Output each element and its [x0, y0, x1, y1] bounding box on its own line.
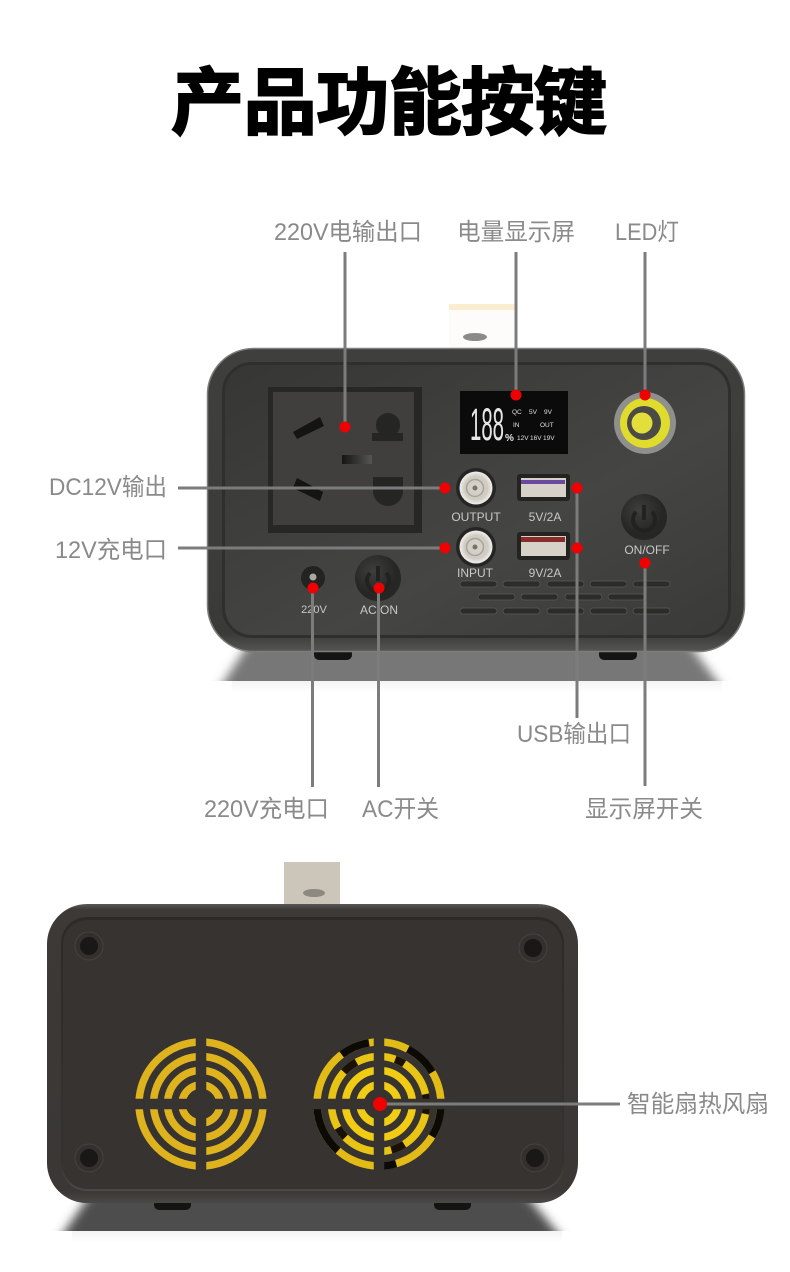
screws	[75, 932, 549, 1172]
port labels: ON/OFF	[624, 543, 670, 557]
LED light	[614, 392, 676, 454]
label: battery display: 电量显示屏	[457, 219, 575, 246]
LCD display: 19V	[543, 435, 555, 442]
label: LED light: LED灯	[615, 219, 679, 246]
LCD display: 5V	[529, 409, 538, 416]
USB port 9V	[517, 532, 570, 560]
callout dots	[308, 390, 650, 1111]
device: back view	[47, 862, 578, 1250]
feet	[314, 648, 637, 660]
label: USB output: USB输出口	[517, 721, 631, 748]
LCD display: IN	[513, 422, 520, 429]
label: AC switch: AC开关	[362, 796, 439, 823]
DC jack	[301, 566, 325, 590]
fan grille: left	[129, 1032, 273, 1176]
feet	[154, 1198, 471, 1210]
input connector	[456, 527, 496, 567]
LCD display: 188	[470, 399, 504, 450]
LCD display	[460, 391, 568, 454]
port labels: AC ON	[360, 603, 398, 617]
label: DC12V output: DC12V输出	[49, 474, 167, 501]
port labels: 5V/2A	[529, 510, 561, 524]
port labels: 9V/2A	[529, 566, 561, 580]
port labels: OUTPUT	[451, 510, 501, 524]
port labels: 220V	[301, 604, 328, 616]
power button: on/off	[621, 494, 667, 540]
recessed front panel	[222, 362, 731, 638]
output connector	[456, 468, 496, 508]
casing	[47, 904, 578, 1203]
ground shadow	[56, 1202, 566, 1234]
LCD display: OUT	[540, 422, 554, 429]
recessed back panel	[61, 917, 564, 1191]
label: display switch: 显示屏开关	[585, 796, 703, 823]
title: 产品功能按键	[171, 63, 607, 144]
USB port 5V	[517, 474, 570, 501]
port labels	[301, 510, 670, 617]
LCD display: 9V	[544, 409, 553, 416]
power button: AC	[355, 555, 401, 601]
LCD display: %	[505, 433, 514, 444]
handle	[449, 304, 517, 348]
ground shadow	[216, 650, 726, 684]
LCD display: 12V	[517, 435, 529, 442]
port labels: INPUT	[457, 566, 494, 580]
fan grille: right	[307, 1032, 451, 1176]
label: 220V charging port: 220V充电口	[204, 796, 329, 823]
AC socket	[268, 387, 422, 533]
label: 12V charging port: 12V充电口	[55, 537, 167, 564]
vent slots	[460, 581, 670, 614]
device: front view	[208, 304, 744, 700]
label: cooling fan: 智能扇热风扇	[627, 1091, 769, 1118]
LCD display: 16V	[530, 435, 542, 442]
callout lines	[178, 252, 645, 1104]
outer casing	[208, 348, 744, 652]
handle	[284, 862, 340, 906]
label: 220V output: 220V电输出口	[274, 219, 422, 246]
LCD display: QC	[512, 409, 522, 416]
